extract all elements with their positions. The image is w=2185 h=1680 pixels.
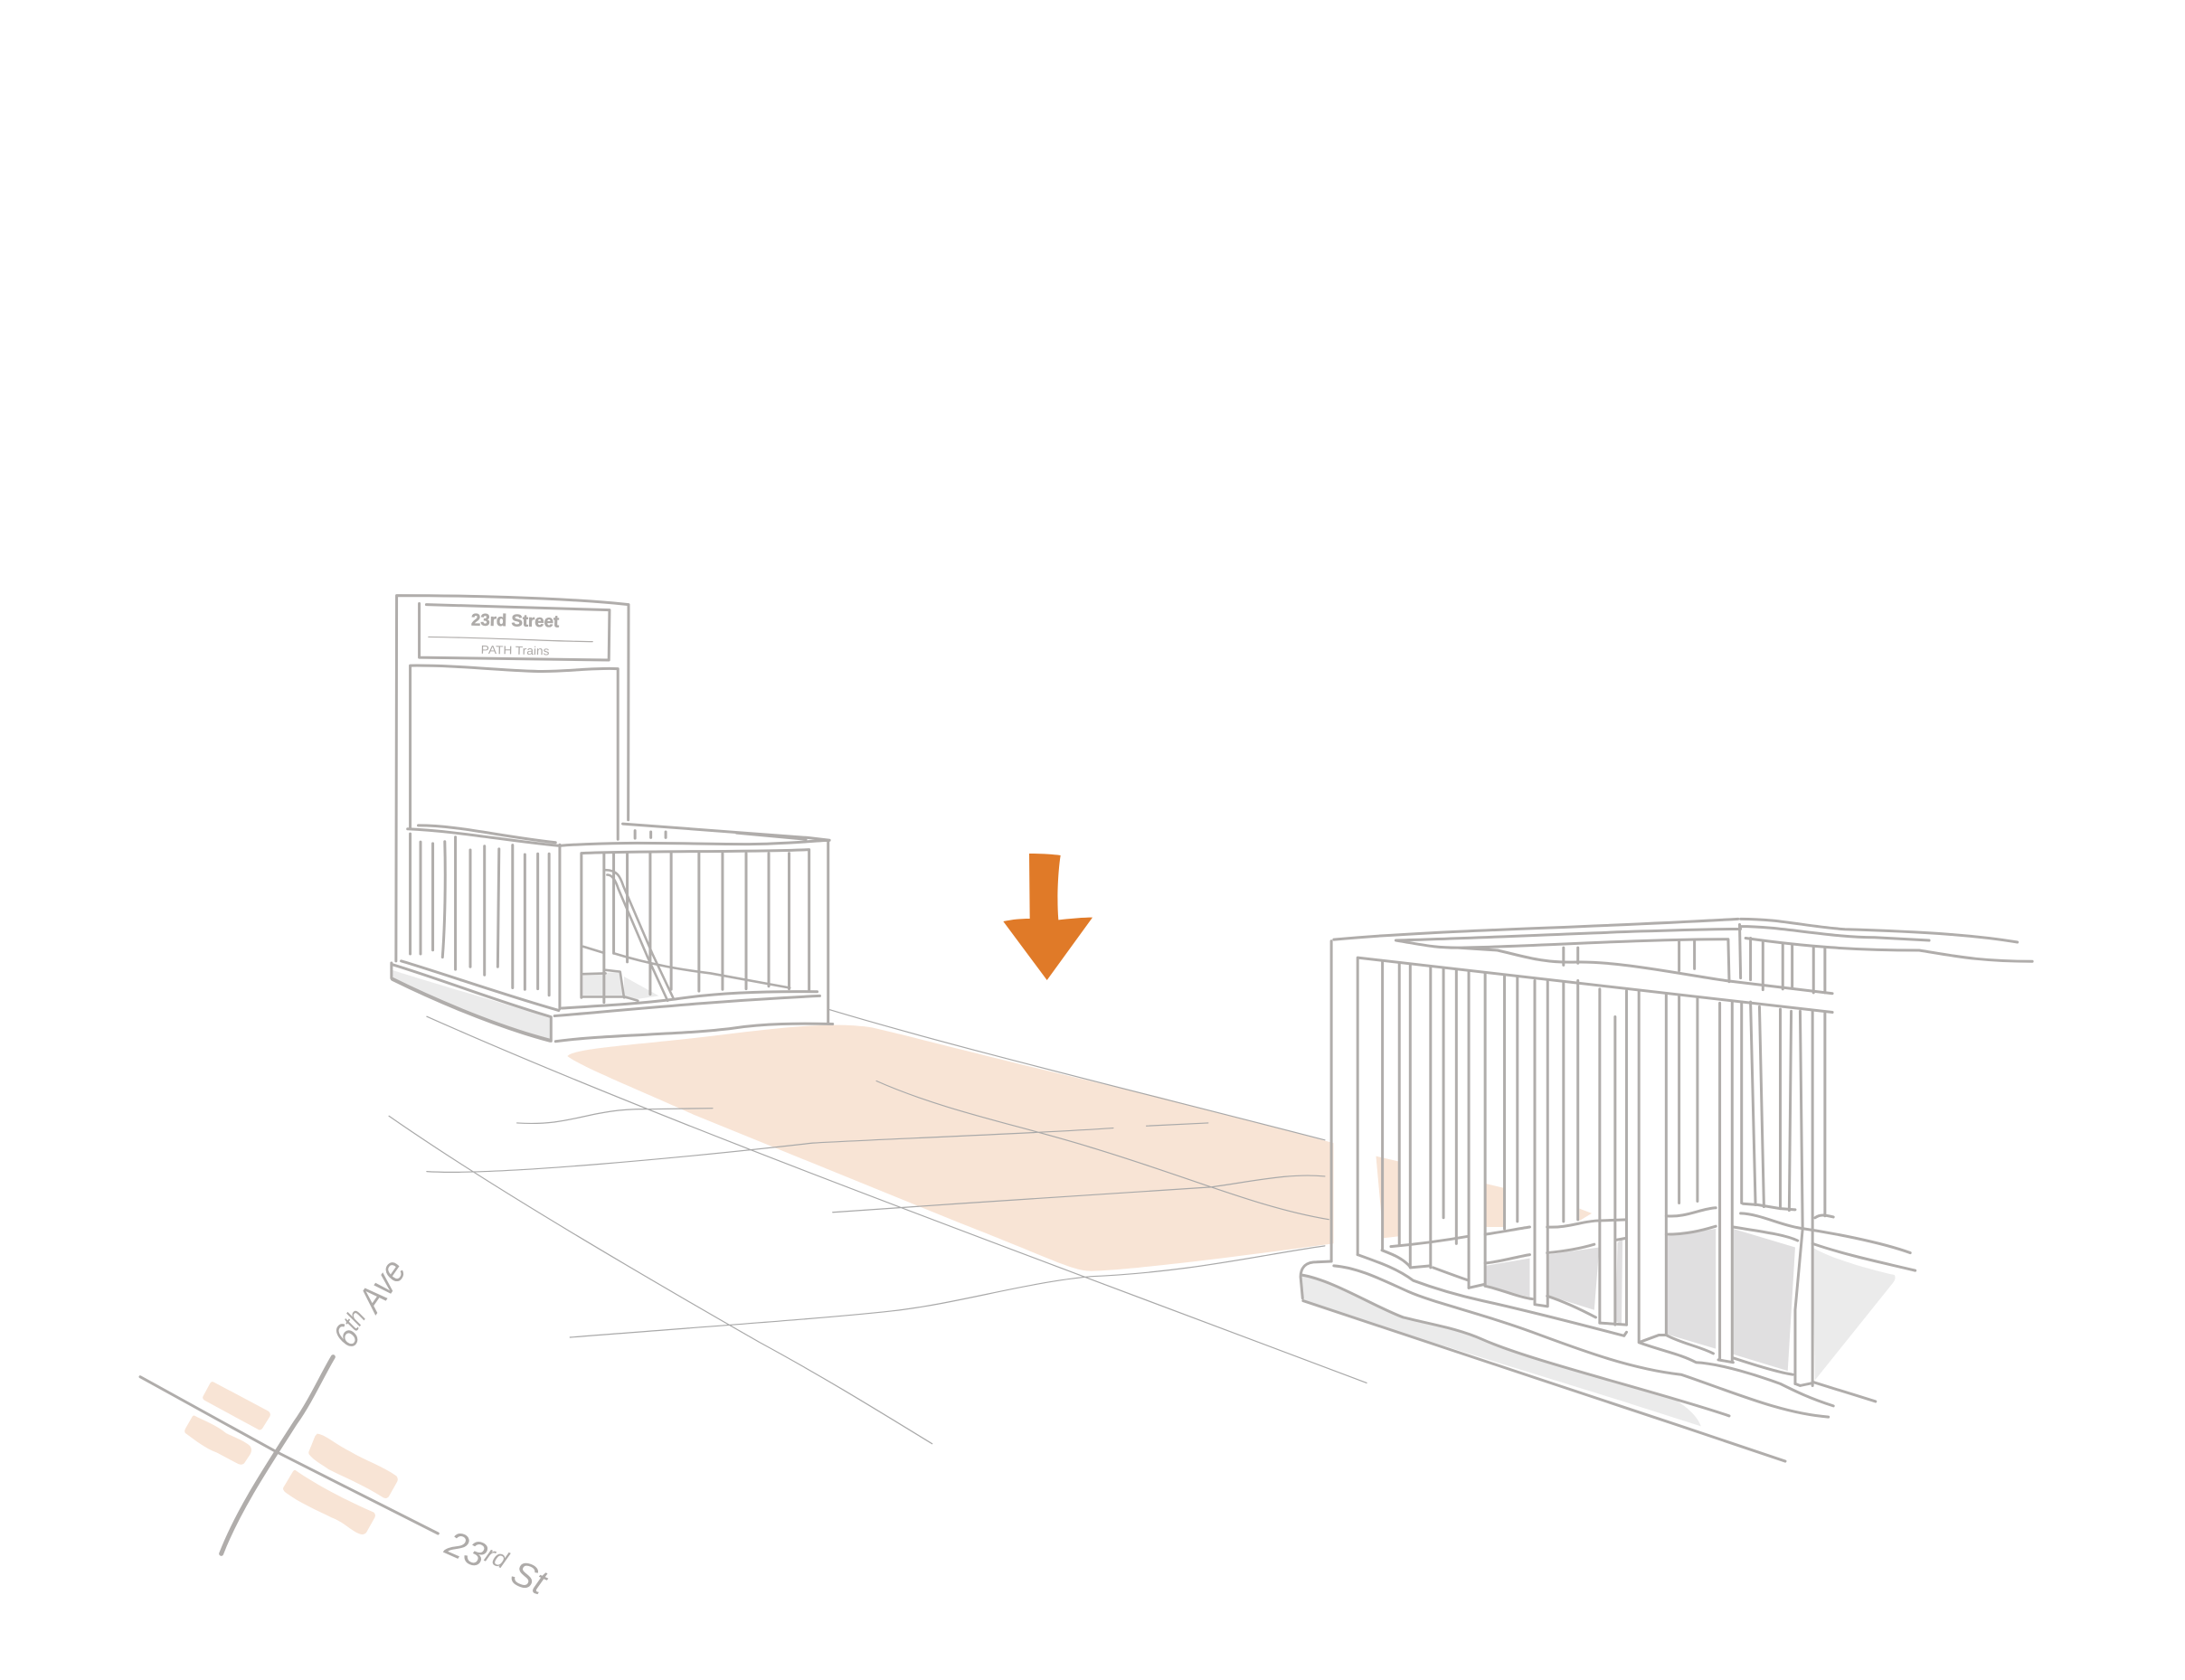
locator map [140, 1252, 554, 1603]
label: 6th Ave: th [337, 1304, 371, 1336]
base shadow [393, 970, 659, 1041]
peach sidewalk seen through railing [1376, 1156, 1592, 1238]
highlighted sidewalk area between entrances [567, 1025, 1333, 1271]
23rd St line [140, 1377, 438, 1534]
label: 23rd St: 23 [440, 1524, 492, 1576]
entrance frame and sign panel [396, 596, 629, 961]
cast shadows [1301, 1247, 1896, 1426]
stair and base lines [1301, 1203, 1915, 1461]
sidewalk pavement lines [389, 1010, 1367, 1444]
railing bars [411, 834, 789, 1003]
sign text: PATH Trains [481, 643, 550, 657]
sign text [428, 609, 593, 658]
stairs and handrail [583, 870, 790, 1001]
entrance location patches [184, 1382, 398, 1534]
sign text: 23rd Street [471, 609, 559, 631]
label: 6th Ave: Ave [346, 1252, 414, 1326]
right entrance [1301, 919, 2032, 1461]
label: 23rd St: St [497, 1548, 554, 1603]
6th Ave line [222, 1357, 333, 1553]
left entrance: 23rd Street PATH Trains [392, 596, 833, 1042]
railing bars [1383, 939, 1825, 1385]
label: 6th Ave: 6 [326, 1316, 369, 1354]
entrance base [392, 961, 833, 1042]
label: 23rd St: rd [481, 1541, 513, 1574]
railing top rails and posts [408, 824, 829, 1024]
arrow: orange downward entrance marker [1003, 854, 1092, 980]
canopy rails [1331, 919, 2032, 1261]
stairwell floor shading [1485, 1229, 1795, 1371]
